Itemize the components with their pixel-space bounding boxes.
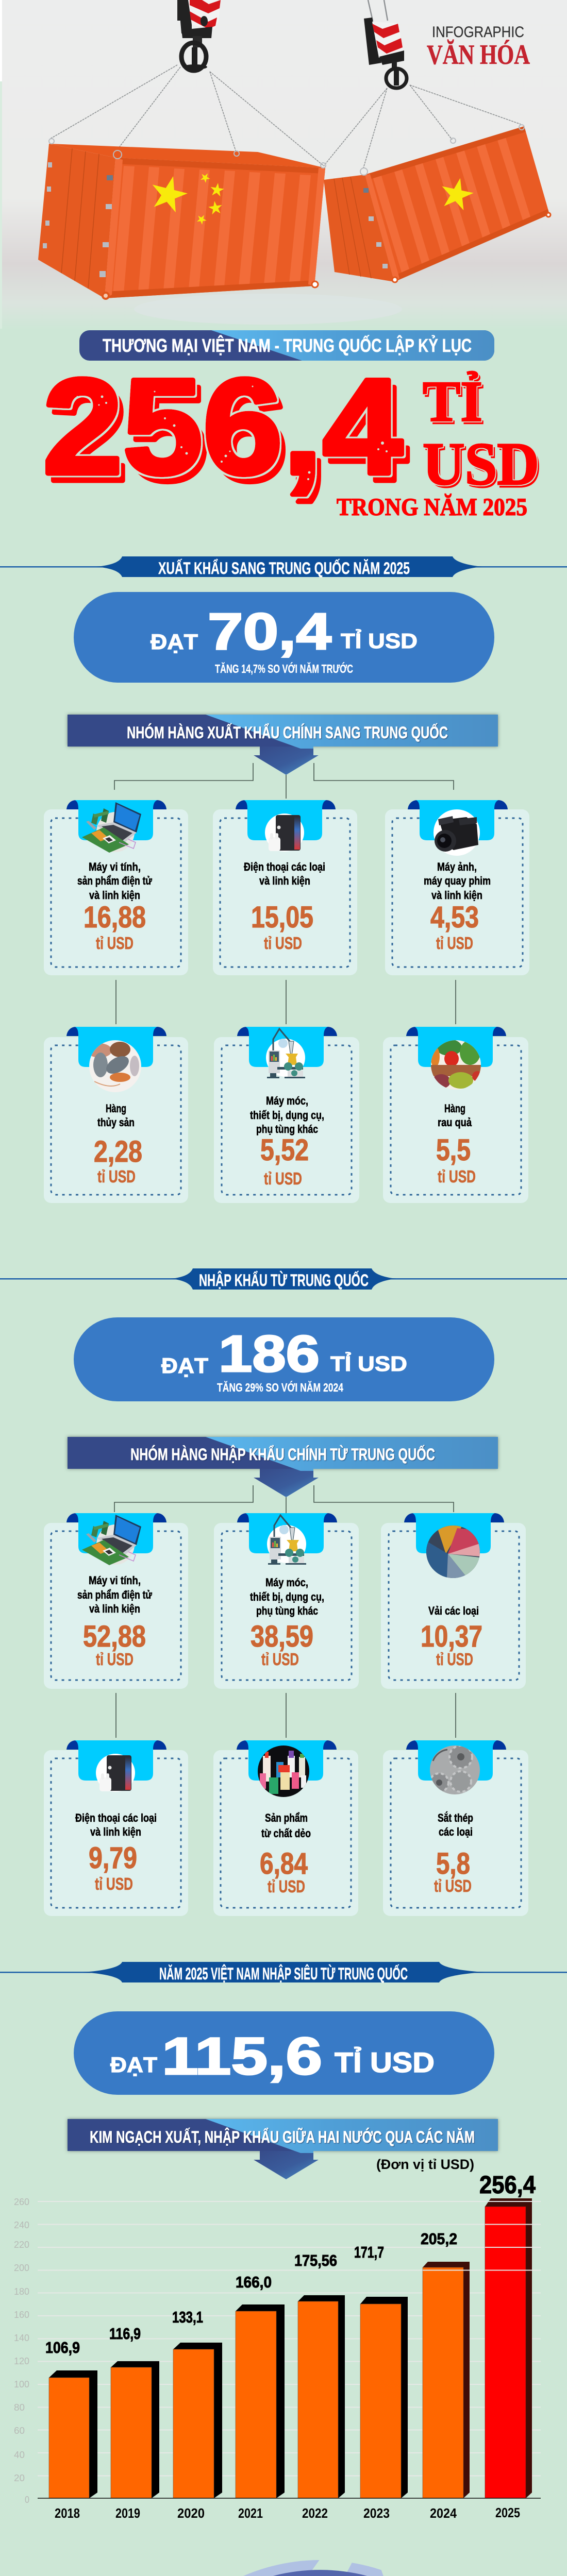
value labels: 106,9 — [45, 2338, 80, 2357]
hero photo: containers on cranes — [0, 0, 567, 330]
year labels: 2023 — [363, 2505, 390, 2521]
label: sản phẩm điện tử — [77, 1588, 152, 1601]
section ribbon: exports — [0, 556, 567, 578]
label — [250, 1576, 324, 1617]
label: và linh kiện — [259, 874, 310, 887]
card: computers export — [44, 800, 188, 975]
value: 5,52 — [260, 1133, 309, 1167]
heading: trade over the years — [68, 2119, 498, 2179]
bar 2023 — [360, 2297, 408, 2498]
y axis labels and grid: 0 — [25, 2494, 29, 2505]
connectors: import header to cards — [114, 1485, 454, 1514]
label: và linh kiện — [89, 889, 140, 902]
y axis labels and grid — [14, 2196, 541, 2505]
panel: export total: ĐẠT — [151, 630, 198, 654]
value labels: 205,2 — [421, 2230, 457, 2248]
year labels: 2021 — [238, 2505, 263, 2521]
year labels: 2020 — [177, 2505, 205, 2521]
label: Máy vi tính, — [89, 1574, 141, 1587]
y axis labels and grid: 60 — [14, 2425, 25, 2436]
label: Máy vi tính, — [89, 860, 141, 873]
value labels: 116,9 — [109, 2325, 141, 2343]
card: computers import — [44, 1513, 188, 1689]
label — [261, 1811, 311, 1840]
left crane hook — [177, 0, 221, 71]
card: seafood export — [44, 1027, 188, 1203]
label: Máy móc, — [266, 1094, 308, 1107]
year labels: 2024 — [430, 2505, 457, 2521]
label — [244, 860, 325, 887]
panel: import total: 186 — [219, 1325, 320, 1383]
container with Vietnamese flag — [324, 125, 551, 282]
label — [77, 1574, 152, 1615]
headline figure 256,4: 256,4 — [43, 350, 404, 502]
icon: fabric swatches — [426, 1526, 480, 1578]
label: Hàng — [444, 1102, 465, 1115]
panel: trade deficit total: 115,6 — [162, 2027, 322, 2086]
y axis labels and grid: 40 — [14, 2449, 25, 2460]
label: Máy móc, — [265, 1576, 308, 1589]
year labels: 2018 — [55, 2505, 80, 2521]
unit: tỉ USD — [97, 1167, 136, 1186]
card: plastics import — [213, 1740, 358, 1916]
panel: import total — [74, 1317, 494, 1401]
year labels: 2025 — [495, 2505, 520, 2520]
unit: tỉ USD — [96, 1650, 134, 1669]
year labels: 2019 — [115, 2505, 140, 2521]
label: Điện thoại các loại — [244, 860, 325, 873]
illustration: globe — [127, 2555, 513, 2576]
baseline — [38, 2498, 541, 2499]
y axis labels and grid: 80 — [14, 2402, 25, 2413]
label: từ chất dẻo — [261, 1827, 311, 1840]
value labels: 256,4 — [479, 2172, 536, 2199]
label: Máy ảnh, — [437, 860, 477, 873]
label — [97, 1102, 135, 1129]
label: máy quay phim — [424, 874, 491, 887]
panel: trade deficit total: ĐẠT — [110, 2053, 157, 2077]
bar 2022 — [298, 2295, 345, 2498]
panel: trade deficit total: TỈ USD — [335, 2046, 435, 2078]
label: và linh kiện — [90, 1825, 141, 1838]
heading: main import groups — [68, 1437, 498, 1497]
icon: video camera — [433, 809, 480, 856]
icon: vegetable basket — [430, 1039, 482, 1090]
logo: Infographic Văn Hóa: VĂN HÓA — [427, 39, 530, 70]
icon: phone and earbuds — [265, 814, 304, 852]
panel: import total: ĐẠT — [161, 1353, 208, 1378]
unit: tỉ USD — [268, 1877, 305, 1896]
bar 2020 — [173, 2343, 222, 2498]
title banner: THƯƠNG MẠI VIỆT NAM - TRUNG QUỐC LẬP KỶ LỤC — [103, 334, 472, 356]
panel: export total: TỈ USD — [341, 629, 418, 653]
panel: import total: TỈ USD — [330, 1352, 407, 1376]
icon: plastic bottles — [258, 1745, 309, 1797]
label: thiết bị, dụng cụ, — [250, 1590, 324, 1603]
y axis labels and grid: 220 — [14, 2239, 29, 2250]
panel: export total — [74, 592, 494, 683]
label: các loại — [439, 1825, 473, 1838]
label: thiết bị, dụng cụ, — [250, 1109, 324, 1122]
unit: tỉ USD — [95, 1874, 133, 1893]
label: thủy sản — [97, 1116, 135, 1129]
value: 15,05 — [251, 901, 313, 934]
label: và linh kiện — [431, 889, 482, 902]
panel: export total: TĂNG 14,7% SO VỚI NĂM TRƯỚC — [215, 662, 353, 675]
label: Hàng — [106, 1102, 126, 1115]
value: 16,88 — [84, 901, 146, 934]
label: Sản phẩm — [265, 1811, 308, 1824]
label: phụ tùng khác — [256, 1123, 318, 1136]
unit: tỉ USD — [96, 934, 134, 953]
heading: main import groups: NHÓM HÀNG NHẬP KHẨU CHÍNH TỪ TRUNG QUỐC — [130, 1445, 435, 1464]
card: machinery import — [214, 1513, 359, 1689]
value: 6,84 — [260, 1847, 308, 1880]
connectors: first to second row — [116, 980, 456, 1024]
card: steel import — [383, 1740, 528, 1916]
y axis labels and grid: 260 — [14, 2196, 29, 2207]
section ribbon: trade deficit — [0, 1962, 567, 1983]
connectors: export header to cards — [114, 763, 454, 799]
panel: export total: 70,4 — [208, 603, 331, 660]
card: fabric import — [381, 1513, 526, 1689]
icon: seafood — [87, 1040, 141, 1092]
value: 4,53 — [430, 901, 479, 934]
bar 2019 — [111, 2361, 159, 2498]
icon: laptop and circuit board — [82, 802, 141, 853]
year labels: 2022 — [302, 2505, 328, 2521]
label — [438, 1102, 472, 1129]
unit: tỉ: TỈ — [423, 370, 482, 434]
label: Vải các loại — [428, 1604, 479, 1617]
y axis labels and grid: 180 — [14, 2286, 29, 2297]
unit note: (Đơn vị tỉ USD) — [376, 2157, 474, 2172]
label — [438, 1811, 473, 1838]
container with Chinese flag — [38, 139, 326, 299]
heading: main export groups — [68, 715, 498, 775]
label: rau quả — [438, 1116, 472, 1129]
label: và linh kiện — [89, 1602, 140, 1615]
title banner — [79, 330, 494, 361]
icon: phone and earbuds — [96, 1754, 135, 1792]
bar 2018 — [49, 2370, 97, 2498]
value: 2,28 — [94, 1135, 142, 1168]
heading: main export groups: NHÓM HÀNG XUẤT KHẨU CHÍNH SANG TRUNG QUỐC — [127, 723, 448, 742]
panel: trade deficit total — [74, 2011, 494, 2095]
label — [424, 860, 491, 902]
bar chart — [14, 2172, 541, 2521]
unit: tỉ USD — [436, 934, 473, 953]
section ribbon: imports: NHẬP KHẨU TỪ TRUNG QUỐC — [199, 1271, 369, 1290]
value: 9,79 — [89, 1841, 137, 1875]
card: cameras export — [385, 800, 529, 975]
unit: tỉ USD — [438, 1167, 476, 1186]
y axis labels and grid: 160 — [14, 2309, 29, 2320]
y axis labels and grid: 100 — [14, 2379, 29, 2389]
section ribbon: exports: XUẤT KHẨU SANG TRUNG QUỐC NĂM 2025 — [158, 559, 410, 578]
label — [75, 1811, 157, 1838]
unit: tỉ USD — [264, 934, 302, 953]
y axis labels and grid: 240 — [14, 2219, 29, 2230]
icon: steel gears — [430, 1745, 480, 1794]
value labels: 171,7 — [354, 2243, 384, 2261]
y axis labels and grid: 20 — [14, 2472, 25, 2483]
unit: tỉ USD — [264, 1169, 302, 1188]
bar 2025 — [485, 2198, 532, 2498]
value: 5,5 — [436, 1133, 471, 1167]
icon: laptop and circuit board — [82, 1515, 141, 1565]
unit: tỉ USD — [261, 1650, 299, 1669]
value: 10,37 — [421, 1620, 482, 1653]
bar 2024 — [423, 2262, 470, 2498]
bar 2021 — [236, 2304, 285, 2498]
label: phụ tùng khác — [256, 1604, 318, 1617]
icon: factory machine — [266, 1029, 305, 1078]
card: phones import — [44, 1740, 188, 1916]
section ribbon: trade deficit: NĂM 2025 VIỆT NAM NHẬP SIÊU TỪ TRUNG QUỐC — [159, 1964, 408, 1983]
unit: USD: USD — [423, 430, 539, 498]
y axis labels and grid: 200 — [14, 2262, 29, 2273]
unit: tỉ USD — [436, 1650, 473, 1669]
card: machinery export — [214, 1027, 359, 1203]
label: Sắt thép — [438, 1811, 473, 1824]
logo: Infographic Văn Hóa — [427, 24, 530, 70]
value: 52,88 — [83, 1620, 146, 1653]
value: 5,8 — [436, 1847, 470, 1880]
y axis labels and grid: 140 — [14, 2332, 29, 2343]
card: vegetables and fruit export — [383, 1027, 528, 1203]
unit: tỉ USD — [434, 1876, 472, 1895]
card: phones export — [213, 800, 357, 975]
panel: import total: TĂNG 29% SO VỚI NĂM 2024 — [217, 1380, 343, 1394]
year labels — [55, 2505, 520, 2521]
y axis labels and grid: 120 — [14, 2355, 29, 2366]
chains — [51, 65, 521, 168]
value labels — [45, 2172, 536, 2357]
value: 38,59 — [251, 1620, 313, 1653]
logo: Infographic Văn Hóa: INFOGRAPHIC — [432, 24, 524, 41]
label — [77, 860, 152, 902]
label: sản phẩm điện tử — [77, 874, 152, 887]
connectors: third to fourth row — [116, 1693, 456, 1738]
subtitle: in 2025: TRONG NĂM 2025 — [337, 493, 527, 521]
section ribbon: imports — [0, 1268, 567, 1290]
icon: factory machine — [267, 1515, 306, 1565]
right crane hook — [364, 0, 407, 88]
label — [250, 1094, 324, 1136]
label: Điện thoại các loại — [75, 1811, 157, 1824]
value labels: 133,1 — [172, 2308, 203, 2326]
value labels: 175,56 — [294, 2251, 337, 2269]
value labels: 166,0 — [236, 2273, 272, 2291]
